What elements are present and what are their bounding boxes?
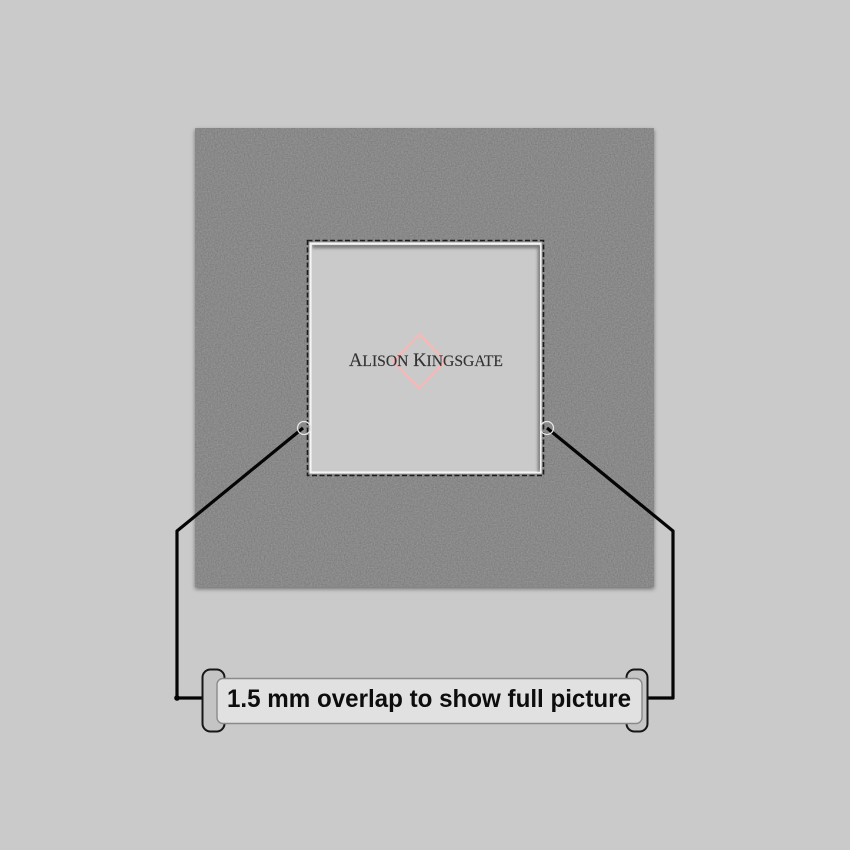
dashed overlap outline [308,240,544,476]
label pill [217,678,642,724]
left marker circle [298,422,310,434]
label text: 1.5 mm overlap to show full picture [227,685,631,713]
right marker circle [540,422,554,434]
mat board [195,128,654,587]
infographic: mat board overlap diagram [174,127,675,732]
logo diamond [393,334,445,388]
right leader line [547,428,673,698]
picture window [310,244,540,472]
left line end dot [174,695,180,701]
left label bracket [202,670,224,732]
logo wordmark: ALISON KINGSGATE [349,350,503,371]
left leader line [177,428,303,698]
logo [349,334,503,388]
right label bracket [626,670,648,732]
